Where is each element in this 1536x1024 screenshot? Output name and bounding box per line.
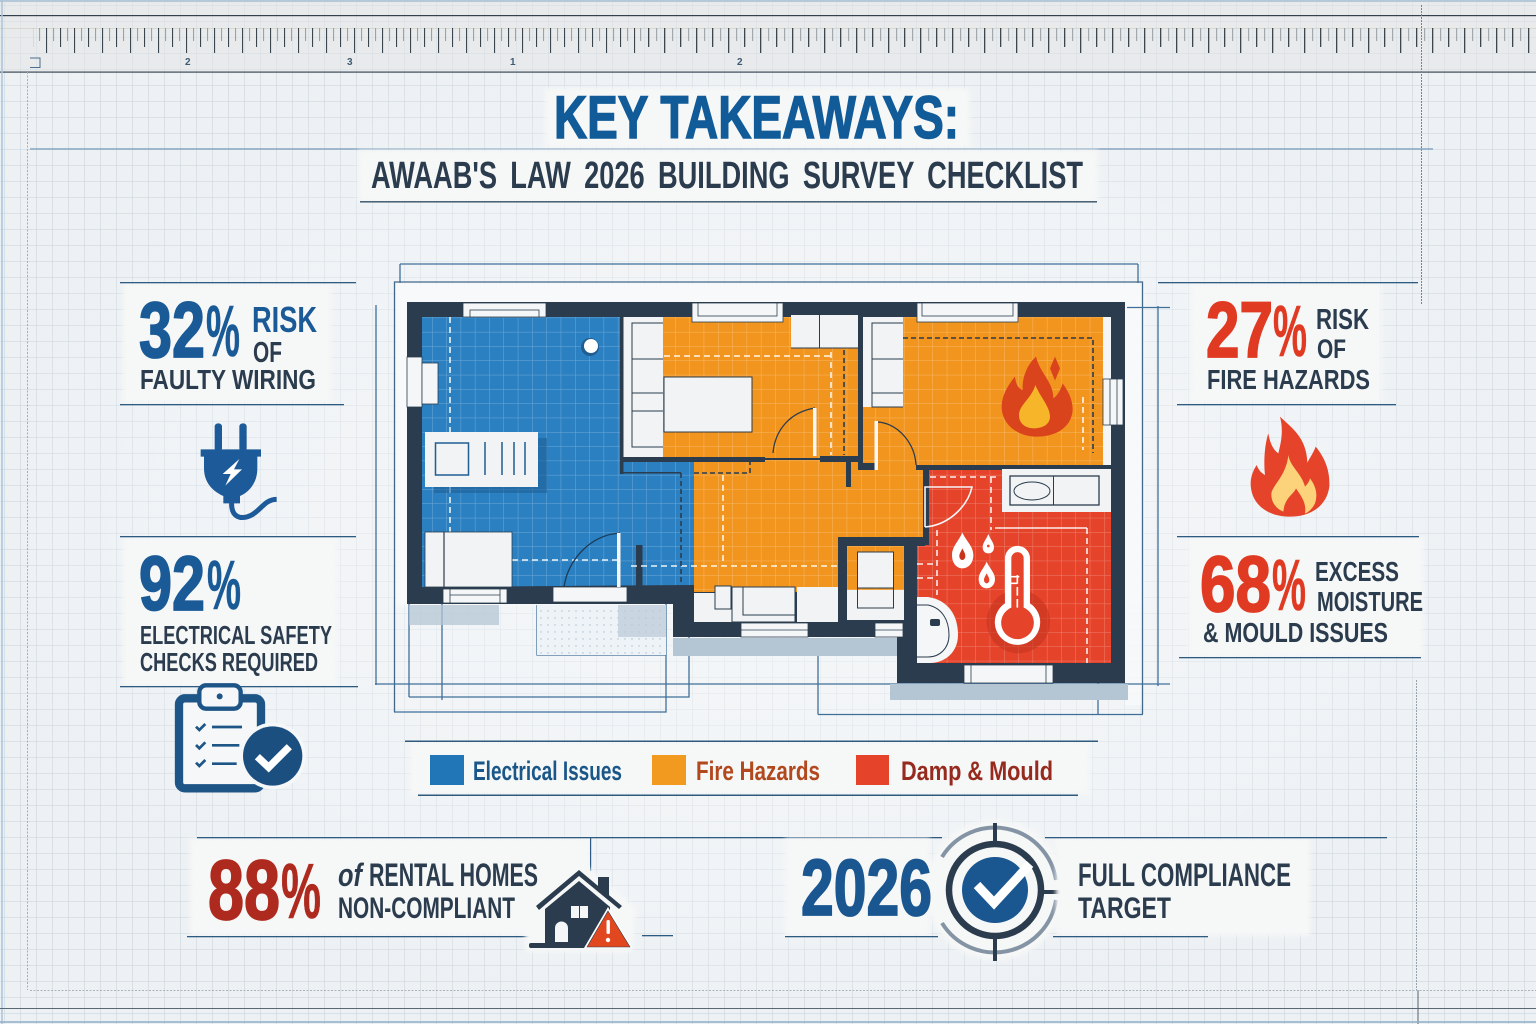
panel: 68% excess moisture and mould: MOISTURE bbox=[1317, 586, 1423, 617]
panel: 32% risk of faulty wiring: OF bbox=[253, 337, 282, 369]
icon: thermometer bbox=[987, 546, 1050, 653]
legend item: fire hazards: Fire Hazards bbox=[696, 756, 820, 786]
panel: 32% risk of faulty wiring: 32 bbox=[139, 285, 205, 374]
lamp marker bbox=[581, 338, 599, 356]
title rule bbox=[30, 148, 1433, 150]
furniture: wardrobes and shelves bbox=[624, 315, 903, 457]
panel: 2026 full compliance target bbox=[785, 837, 1387, 937]
panel: 88% of rental homes non-compliant: % bbox=[281, 847, 321, 935]
panel: 32% risk of faulty wiring: RISK bbox=[252, 299, 317, 340]
furniture: desk bbox=[425, 432, 547, 493]
panel: 88% of rental homes non-compliant: of bbox=[338, 857, 365, 893]
outer walls bbox=[407, 302, 1125, 683]
panel: 68% excess moisture and mould: & MOULD ISSUES bbox=[1203, 617, 1388, 648]
panel: 88% of rental homes non-compliant: RENTAL HOMES bbox=[369, 857, 538, 893]
legend item: fire hazards bbox=[652, 755, 820, 786]
furniture: bed in blue room bbox=[425, 532, 512, 587]
subtitle: AWAAB'S LAW 2026 BUILDING SURVEY CHECKLIST bbox=[371, 155, 1083, 197]
panel: 68% excess moisture and mould: EXCESS bbox=[1315, 556, 1399, 587]
ruler band: 1 bbox=[510, 57, 516, 68]
dotted entrance patch bbox=[537, 605, 666, 655]
panel: 27% risk of fire hazards: 27 bbox=[1206, 285, 1273, 374]
toilet bbox=[917, 597, 958, 663]
subtitle bbox=[358, 150, 1098, 203]
panel: 32% risk of faulty wiring: % bbox=[206, 292, 240, 372]
panel: 2026 full compliance target: FULL COMPLIANCE bbox=[1078, 857, 1291, 893]
panel: 2026 full compliance target: 2026 bbox=[801, 843, 932, 932]
panel: 88% of rental homes non-compliant: NON-COMPLIANT bbox=[338, 892, 515, 925]
legend bbox=[405, 740, 1098, 796]
legend item: damp and mould: Damp & Mould bbox=[901, 756, 1053, 786]
room: electrical blue bbox=[422, 317, 694, 587]
icon: flame bbox=[1251, 417, 1329, 517]
panel: 27% risk of fire hazards bbox=[1158, 282, 1418, 405]
panel: 92% electrical safety checks: 92 bbox=[139, 541, 205, 627]
panel: 27% risk of fire hazards: OF bbox=[1317, 334, 1346, 364]
panel: 32% risk of faulty wiring bbox=[120, 282, 356, 405]
panel: 92% electrical safety checks: CHECKS REQUIRED bbox=[140, 647, 318, 677]
panel: 27% risk of fire hazards: RISK bbox=[1316, 304, 1369, 336]
ruler band: 2 bbox=[185, 57, 191, 68]
panel: 88% of rental homes non-compliant: 88 bbox=[208, 843, 280, 937]
dashed service lines bbox=[450, 317, 1093, 663]
panel: 88% of rental homes non-compliant bbox=[187, 837, 942, 937]
panel: 68% excess moisture and mould bbox=[1177, 536, 1423, 658]
legend item: electrical issues: Electrical Issues bbox=[473, 756, 622, 786]
icon: house with warning triangle bbox=[525, 860, 636, 952]
panel: 2026 full compliance target: TARGET bbox=[1078, 892, 1171, 925]
panel: 92% electrical safety checks: % bbox=[207, 546, 241, 624]
title: KEY TAKEAWAYS: bbox=[554, 84, 959, 151]
doors bbox=[564, 408, 972, 587]
ruler band: 2 bbox=[737, 57, 743, 68]
icon: clipboard with check bbox=[179, 685, 306, 789]
icon: flame in floor plan bbox=[1002, 357, 1073, 437]
interior white surround bbox=[1103, 317, 1111, 465]
legend item: electrical issues bbox=[430, 755, 622, 786]
ruler band: 3 bbox=[347, 57, 353, 68]
panel: 92% electrical safety checks bbox=[120, 536, 358, 687]
icon: electric plug bbox=[201, 423, 277, 517]
interior walls bbox=[620, 317, 1110, 650]
panel: 27% risk of fire hazards: FIRE HAZARDS bbox=[1207, 364, 1370, 395]
plan drawing sheet bbox=[375, 264, 1170, 714]
ruler band bbox=[0, 0, 1536, 73]
room: damp and mould red bbox=[917, 470, 1111, 663]
icon: water droplets bbox=[952, 533, 995, 588]
panel: 32% risk of faulty wiring: FAULTY WIRING bbox=[140, 364, 316, 395]
wall shadows bbox=[409, 605, 1128, 700]
panel: 92% electrical safety checks: ELECTRICAL SAFETY bbox=[140, 620, 332, 650]
windows bbox=[407, 303, 1123, 683]
kitchen sink unit bbox=[1002, 469, 1111, 512]
furniture: bottom units bbox=[694, 552, 904, 622]
floor plan bbox=[375, 264, 1170, 714]
legend item: damp and mould bbox=[856, 755, 1053, 786]
panel: 27% risk of fire hazards: % bbox=[1273, 292, 1307, 372]
rooms: fire hazard orange bbox=[663, 317, 1103, 592]
icon: target with check bbox=[925, 820, 1067, 961]
panel: 68% excess moisture and mould: 68 bbox=[1200, 539, 1271, 628]
panel: 68% excess moisture and mould: % bbox=[1272, 546, 1306, 626]
